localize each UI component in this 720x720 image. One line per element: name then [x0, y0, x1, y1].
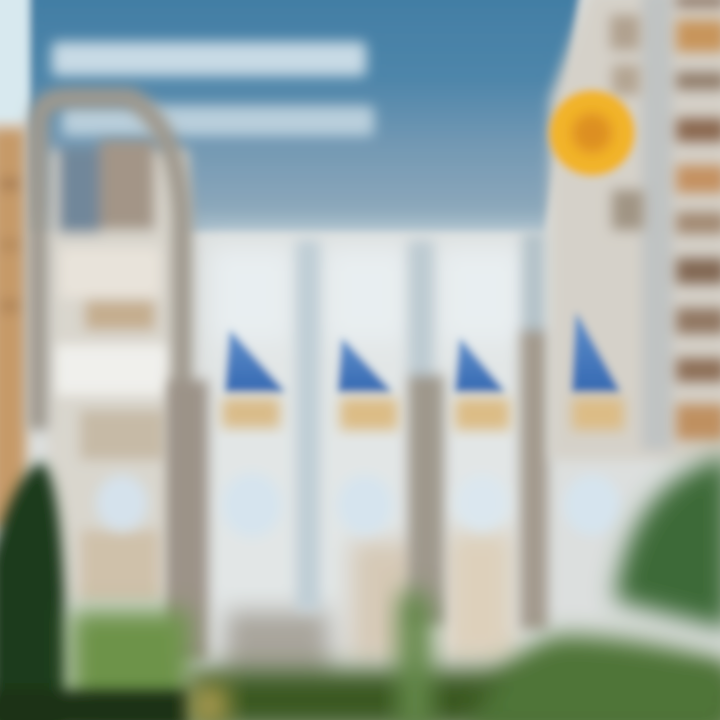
label band 3: [455, 398, 510, 430]
panel: card column 1: [222, 330, 285, 537]
circle: left arch medallion: [96, 475, 148, 531]
panel: vertical pillars: [296, 232, 548, 630]
label band 2: [340, 398, 398, 430]
panel: light facade columns area: [205, 240, 545, 680]
panel: blue header sky: [30, 0, 582, 232]
panel: right tower: [550, 0, 720, 460]
panel: card column 4: [564, 312, 624, 535]
panel: card column 2: [337, 338, 398, 535]
tower floor bands: [610, 0, 720, 440]
panel: card column 3: [455, 338, 510, 531]
circle 4: [564, 475, 620, 535]
icon: blue shape 3: [455, 338, 505, 392]
heading: title bars: [52, 42, 374, 136]
panel: left brick building: [0, 128, 26, 528]
panel: foreground trees: [0, 455, 720, 720]
icon: blue shape 1: [225, 330, 285, 392]
circle 3: [456, 475, 508, 531]
panel: arched building on left: [38, 98, 208, 660]
circle 1: [222, 473, 282, 537]
label band 4: [572, 398, 624, 430]
label band 1: [222, 398, 280, 428]
icon: blue shape 2: [338, 338, 392, 392]
circle 2: [337, 475, 393, 535]
icon: sun badge: [549, 90, 635, 176]
icon: blue shape 4: [572, 312, 620, 392]
